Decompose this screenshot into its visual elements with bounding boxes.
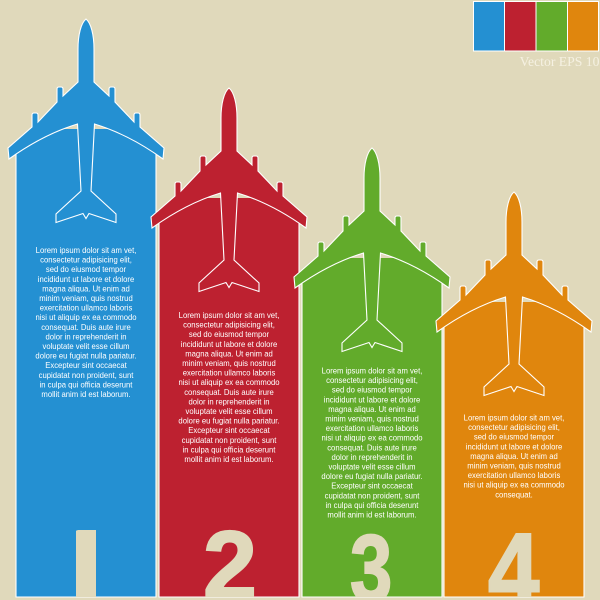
text block: step 2: Lorem ipsum dolor sit am vet, bbox=[179, 311, 279, 320]
text block: step 2: sed do eiusmod tempor bbox=[189, 330, 269, 339]
text block: step 2: magna aliqua. Ut enim ad bbox=[185, 349, 273, 358]
text block: step 4: Lorem ipsum dolor sit am vet, bbox=[464, 413, 564, 423]
text block: step 3: consequat. Duis aute irure bbox=[327, 443, 417, 452]
text block: step 3: magna aliqua. Ut enim ad bbox=[328, 405, 416, 414]
text block: step 1: mollit anim id est laborum. bbox=[41, 390, 131, 399]
text block: step 4: minim veniam, quis nostrud bbox=[467, 461, 561, 471]
text block: step 3: nisi ut aliquip ex ea commodo bbox=[321, 433, 423, 443]
green column bbox=[302, 258, 442, 597]
text block: step 4: consectetur adipisicing elit, bbox=[468, 423, 560, 432]
text block: step 1: exercitation ullamco laboris bbox=[40, 303, 132, 313]
text block: step 3: mollit anim id est laborum. bbox=[327, 510, 417, 520]
text block: step 2: cupidatat non proident, sunt bbox=[182, 436, 277, 445]
text block: step 2: consequat. Duis aute irure bbox=[184, 388, 274, 397]
text block: step 3: sed do eiusmod tempor bbox=[332, 385, 412, 395]
orange column bbox=[444, 302, 584, 597]
text block: step 1: nisi ut aliquip ex ea commodo bbox=[35, 313, 137, 322]
text block: step 1: sed do eiusmod tempor bbox=[46, 265, 126, 274]
text block: step 3: dolore eu fugiat nulla pariatur. bbox=[321, 472, 423, 481]
text block: step 1: consequat. Duis aute irure bbox=[41, 323, 131, 332]
text block: step 2: incididunt ut labore et dolore bbox=[181, 340, 278, 349]
text block: step 4: incididunt ut labore et dolore bbox=[466, 442, 563, 451]
text block: step 3: cupidatat non proident, sunt bbox=[325, 491, 420, 500]
text block: step 3: consectetur adipisicing elit, bbox=[326, 376, 418, 385]
text block: step 4: sed do eiusmod tempor bbox=[474, 432, 554, 442]
text block: step 1: Lorem ipsum dolor sit am vet, bbox=[36, 246, 136, 255]
icon: blue airplane bbox=[8, 19, 164, 222]
text block: step 2: dolor in reprehenderit in bbox=[188, 397, 270, 406]
red column bbox=[159, 198, 299, 597]
text block: step 1: minim veniam, quis nostrud bbox=[39, 294, 133, 303]
text block: step 1: dolore eu fugiat nulla pariatur. bbox=[35, 351, 137, 361]
text block: step 3: minim veniam, quis nostrud bbox=[325, 414, 419, 424]
text block: step 2: consectetur adipisicing elit, bbox=[183, 320, 275, 330]
column outline bbox=[159, 222, 299, 597]
text block: step 3: dolor in reprehenderit in bbox=[331, 453, 413, 462]
panel: step 4 orange bbox=[436, 192, 592, 600]
text block: step 2: in culpa qui officia deserunt bbox=[183, 445, 276, 454]
icon: red airplane bbox=[151, 88, 307, 292]
text block: step 1: magna aliqua. Ut enim ad bbox=[42, 284, 130, 293]
text block: step 3: Lorem ipsum dolor sit am vet, bbox=[322, 366, 422, 376]
text block: step 4: exercitation ullamco laboris bbox=[468, 471, 560, 480]
text block: step 1: cupidatat non proident, sunt bbox=[39, 371, 134, 380]
vector label: Vector EPS 10 bbox=[520, 54, 600, 69]
text block: step 3: in culpa qui officia deserunt bbox=[326, 501, 419, 510]
icon: orange airplane bbox=[436, 192, 592, 396]
blue column bbox=[16, 129, 156, 597]
panel: step 1 blue bbox=[8, 19, 164, 600]
text block: step 2: nisi ut aliquip ex ea commodo bbox=[178, 378, 280, 387]
panel: step 3 green bbox=[294, 148, 450, 600]
text block: step 3: Excepteur sint occaecat bbox=[331, 481, 413, 491]
text block: step 1: incididunt ut labore et dolore bbox=[38, 275, 135, 284]
text block: step 2: Excepteur sint occaecat bbox=[188, 426, 270, 435]
panel: step 2 red bbox=[151, 88, 307, 600]
text block: step 1: dolor in reprehenderit in bbox=[45, 332, 127, 341]
text block: step 1: consectetur adipisicing elit, bbox=[40, 255, 132, 265]
text block: step 3: voluptate velit esse cillum bbox=[328, 462, 416, 472]
icon: green airplane bbox=[294, 148, 450, 352]
colour swatches bbox=[474, 2, 598, 51]
text block: step 3: incididunt ut labore et dolore bbox=[324, 395, 421, 404]
text block: step 1: Excepteur sint occaecat bbox=[45, 361, 127, 370]
text block: step 2: mollit anim id est laborum. bbox=[184, 455, 274, 464]
text block: step 3: exercitation ullamco laboris bbox=[326, 424, 418, 433]
text block: step 2: minim veniam, quis nostrud bbox=[182, 359, 276, 368]
column outline bbox=[444, 326, 584, 597]
text block: step 1: in culpa qui officia deserunt bbox=[40, 380, 133, 389]
column outline bbox=[302, 282, 442, 597]
text block: step 4: magna aliqua. Ut enim ad bbox=[470, 452, 558, 461]
text block: step 2: exercitation ullamco laboris bbox=[183, 368, 275, 378]
text block: step 4: consequat. bbox=[495, 490, 533, 499]
text block: step 2: voluptate velit esse cillum bbox=[185, 407, 273, 416]
text block: step 4: nisi ut aliquip ex ea commodo bbox=[463, 480, 565, 490]
text block: step 2: dolore eu fugiat nulla pariatur. bbox=[178, 416, 280, 426]
text block: step 1: voluptate velit esse cillum bbox=[42, 342, 130, 351]
column outline bbox=[16, 153, 156, 597]
